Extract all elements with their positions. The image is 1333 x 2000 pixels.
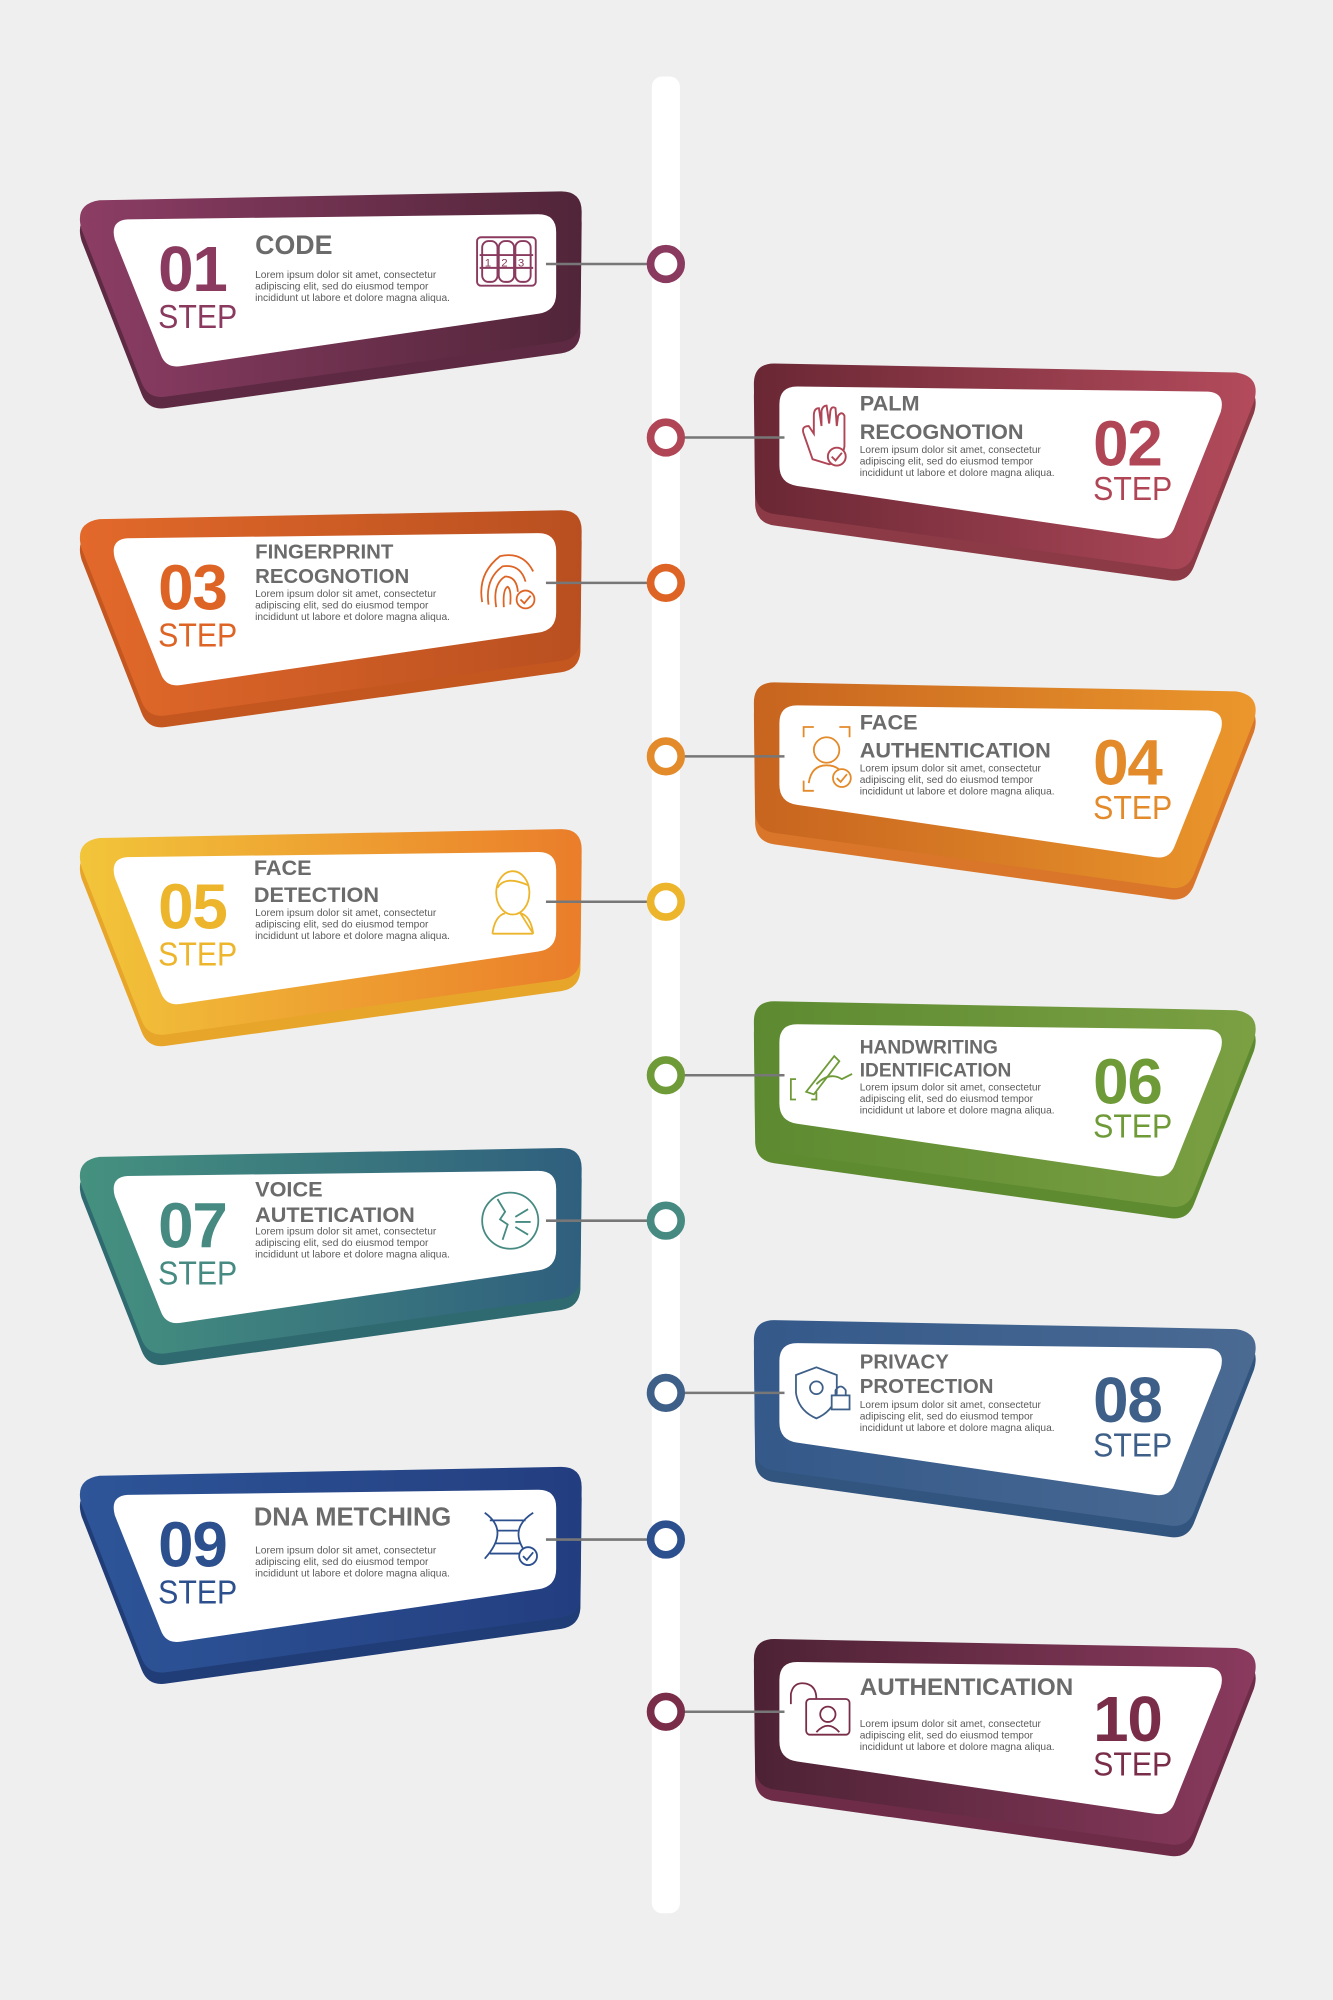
description 08: adipiscing elit, sed do eiusmod tempor (860, 1412, 1034, 1423)
title: voice autetication: VOICE (255, 1176, 323, 1201)
step number 07: STEP (158, 1255, 237, 1292)
step number 08: 08 (1093, 1364, 1162, 1436)
step 08 card (754, 1320, 1256, 1537)
connector 08 (651, 1378, 784, 1408)
description 10: incididunt ut labore et dolore magna aliqua. (860, 1742, 1055, 1753)
title: handwriting identification: IDENTIFICATION (860, 1061, 1011, 1082)
step number 01: 01 (158, 233, 227, 305)
title: palm recognotion: RECOGNOTION (860, 419, 1024, 444)
description 01: incididunt ut labore et dolore magna aliqua. (255, 293, 450, 304)
title: privacy protection (860, 1352, 993, 1398)
title: face detection (254, 855, 379, 907)
title: palm recognotion (860, 391, 1024, 444)
description 04: adipiscing elit, sed do eiusmod tempor (860, 775, 1034, 786)
description 07: adipiscing elit, sed do eiusmod tempor (255, 1238, 429, 1249)
description 05 (255, 908, 450, 942)
step number 06: STEP (1093, 1109, 1172, 1146)
step number 03 (158, 552, 237, 655)
connector 06 (651, 1060, 784, 1091)
description 10 (860, 1719, 1055, 1753)
description 06: adipiscing elit, sed do eiusmod tempor (860, 1094, 1034, 1105)
step number 01 (158, 233, 237, 336)
title: face detection: FACE (254, 855, 312, 880)
title: CODE: CODE (255, 230, 332, 260)
step number 01: STEP (158, 299, 237, 336)
step number 06 (1093, 1045, 1172, 1146)
description 01: adipiscing elit, sed do eiusmod tempor (255, 282, 429, 293)
icon: shield lock (796, 1367, 850, 1418)
description 10: adipiscing elit, sed do eiusmod tempor (860, 1731, 1034, 1742)
connector 05 (546, 886, 681, 917)
step number 09 (158, 1508, 237, 1611)
step number 03: 03 (158, 552, 227, 624)
description 07: incididunt ut labore et dolore magna aliqua. (255, 1250, 450, 1261)
description 01: Lorem ipsum dolor sit amet, consectetur (255, 270, 437, 281)
step number 05 (158, 871, 237, 974)
icon: code lock: 2 (501, 258, 508, 270)
description 09 (255, 1546, 450, 1580)
description 07 (255, 1227, 450, 1261)
title: fingerprint recognotion: FINGERPRINT (255, 542, 394, 564)
description 04: incididunt ut labore et dolore magna aliqua. (860, 787, 1055, 798)
step 10 card (754, 1639, 1256, 1856)
connector 02 (651, 422, 784, 453)
description 06 (860, 1083, 1055, 1117)
description 03 (255, 589, 450, 623)
title: face authentication (860, 710, 1051, 763)
step number 07: 07 (158, 1189, 227, 1261)
title: fingerprint recognotion (255, 542, 409, 588)
description 07: Lorem ipsum dolor sit amet, consectetur (255, 1227, 437, 1238)
step number 10: 10 (1093, 1683, 1162, 1755)
description 03: adipiscing elit, sed do eiusmod tempor (255, 600, 429, 611)
step number 09: 09 (158, 1508, 227, 1580)
icon: fingerprint (481, 555, 534, 608)
title: voice autetication (255, 1176, 415, 1227)
connector 04 (651, 741, 784, 772)
title: face detection: DETECTION (254, 882, 379, 907)
step number 08 (1093, 1364, 1172, 1465)
connector 07 (546, 1205, 681, 1236)
description 04 (860, 764, 1055, 798)
title: face authentication: FACE (860, 710, 918, 735)
title: face authentication: AUTHENTICATION (860, 738, 1051, 763)
description 09: adipiscing elit, sed do eiusmod tempor (255, 1557, 429, 1568)
description 02: incididunt ut labore et dolore magna aliqua. (860, 468, 1055, 479)
connector 03 (546, 568, 681, 598)
step 09 card (80, 1467, 582, 1684)
description 06: Lorem ipsum dolor sit amet, consectetur (860, 1083, 1042, 1094)
description 09: incididunt ut labore et dolore magna aliqua. (255, 1569, 450, 1580)
icon: code lock: 3 (518, 258, 524, 270)
description 03: incididunt ut labore et dolore magna aliqua. (255, 612, 450, 623)
step number 02: 02 (1093, 408, 1162, 480)
step 04 card (754, 682, 1256, 900)
step number 04: STEP (1093, 790, 1172, 827)
title: voice autetication: AUTETICATION (255, 1202, 415, 1227)
icon: handwriting (791, 1056, 852, 1099)
connector 09 (546, 1524, 681, 1555)
icon: palm (803, 406, 846, 466)
icon: voice (482, 1193, 538, 1249)
description 08 (860, 1400, 1055, 1434)
title: handwriting identification (860, 1038, 1011, 1082)
icon: face scan (804, 727, 851, 791)
step number 09: STEP (158, 1574, 237, 1611)
title: palm recognotion: PALM (860, 391, 920, 416)
timeline vertical bar (652, 77, 680, 1913)
description 02: adipiscing elit, sed do eiusmod tempor (860, 456, 1034, 467)
step 07 card (80, 1148, 582, 1365)
title: authentication: AUTHENTICATION (860, 1674, 1073, 1701)
step number 02 (1093, 408, 1172, 508)
description 08: incididunt ut labore et dolore magna aliqua. (860, 1423, 1055, 1434)
icon: DNA (485, 1513, 537, 1565)
description 02: Lorem ipsum dolor sit amet, consectetur (860, 445, 1042, 456)
title: privacy protection: PRIVACY (860, 1352, 949, 1374)
step number 05: STEP (158, 937, 237, 974)
title: handwriting identification: HANDWRITING (860, 1038, 998, 1059)
step number 10 (1093, 1683, 1172, 1784)
title: DNA metching: DNA METCHING (254, 1504, 451, 1532)
description 05: incididunt ut labore et dolore magna aliqua. (255, 931, 450, 942)
step number 02: STEP (1093, 471, 1172, 508)
description 09: Lorem ipsum dolor sit amet, consectetur (255, 1546, 437, 1557)
description 05: adipiscing elit, sed do eiusmod tempor (255, 919, 429, 930)
step 02 card (754, 364, 1256, 581)
icon: padlock face (791, 1683, 850, 1735)
step 03 card (80, 510, 582, 727)
description 02 (860, 445, 1055, 479)
connector 10 (651, 1696, 784, 1727)
connector 01 (546, 249, 681, 279)
step number 04: 04 (1093, 726, 1163, 798)
step 05 card (80, 829, 582, 1046)
icon: code lock (477, 237, 536, 286)
step 01 card (80, 191, 582, 409)
step 06 card (754, 1001, 1256, 1218)
description 03: Lorem ipsum dolor sit amet, consectetur (255, 589, 437, 600)
step number 03: STEP (158, 618, 237, 655)
step number 04 (1093, 726, 1172, 827)
icon: face (492, 871, 533, 934)
step number 07 (158, 1189, 237, 1292)
step number 06: 06 (1093, 1045, 1162, 1117)
step number 10: STEP (1093, 1747, 1172, 1784)
description 06: incididunt ut labore et dolore magna aliqua. (860, 1106, 1055, 1117)
step number 05: 05 (158, 871, 227, 943)
description 08: Lorem ipsum dolor sit amet, consectetur (860, 1400, 1042, 1411)
description 01 (255, 270, 450, 304)
title: privacy protection: PROTECTION (860, 1376, 993, 1398)
title: fingerprint recognotion: RECOGNOTION (255, 566, 409, 588)
description 10: Lorem ipsum dolor sit amet, consectetur (860, 1719, 1042, 1730)
description 04: Lorem ipsum dolor sit amet, consectetur (860, 764, 1042, 775)
step number 08: STEP (1093, 1428, 1172, 1465)
description 05: Lorem ipsum dolor sit amet, consectetur (255, 908, 437, 919)
icon: code lock: 1 (485, 258, 491, 270)
